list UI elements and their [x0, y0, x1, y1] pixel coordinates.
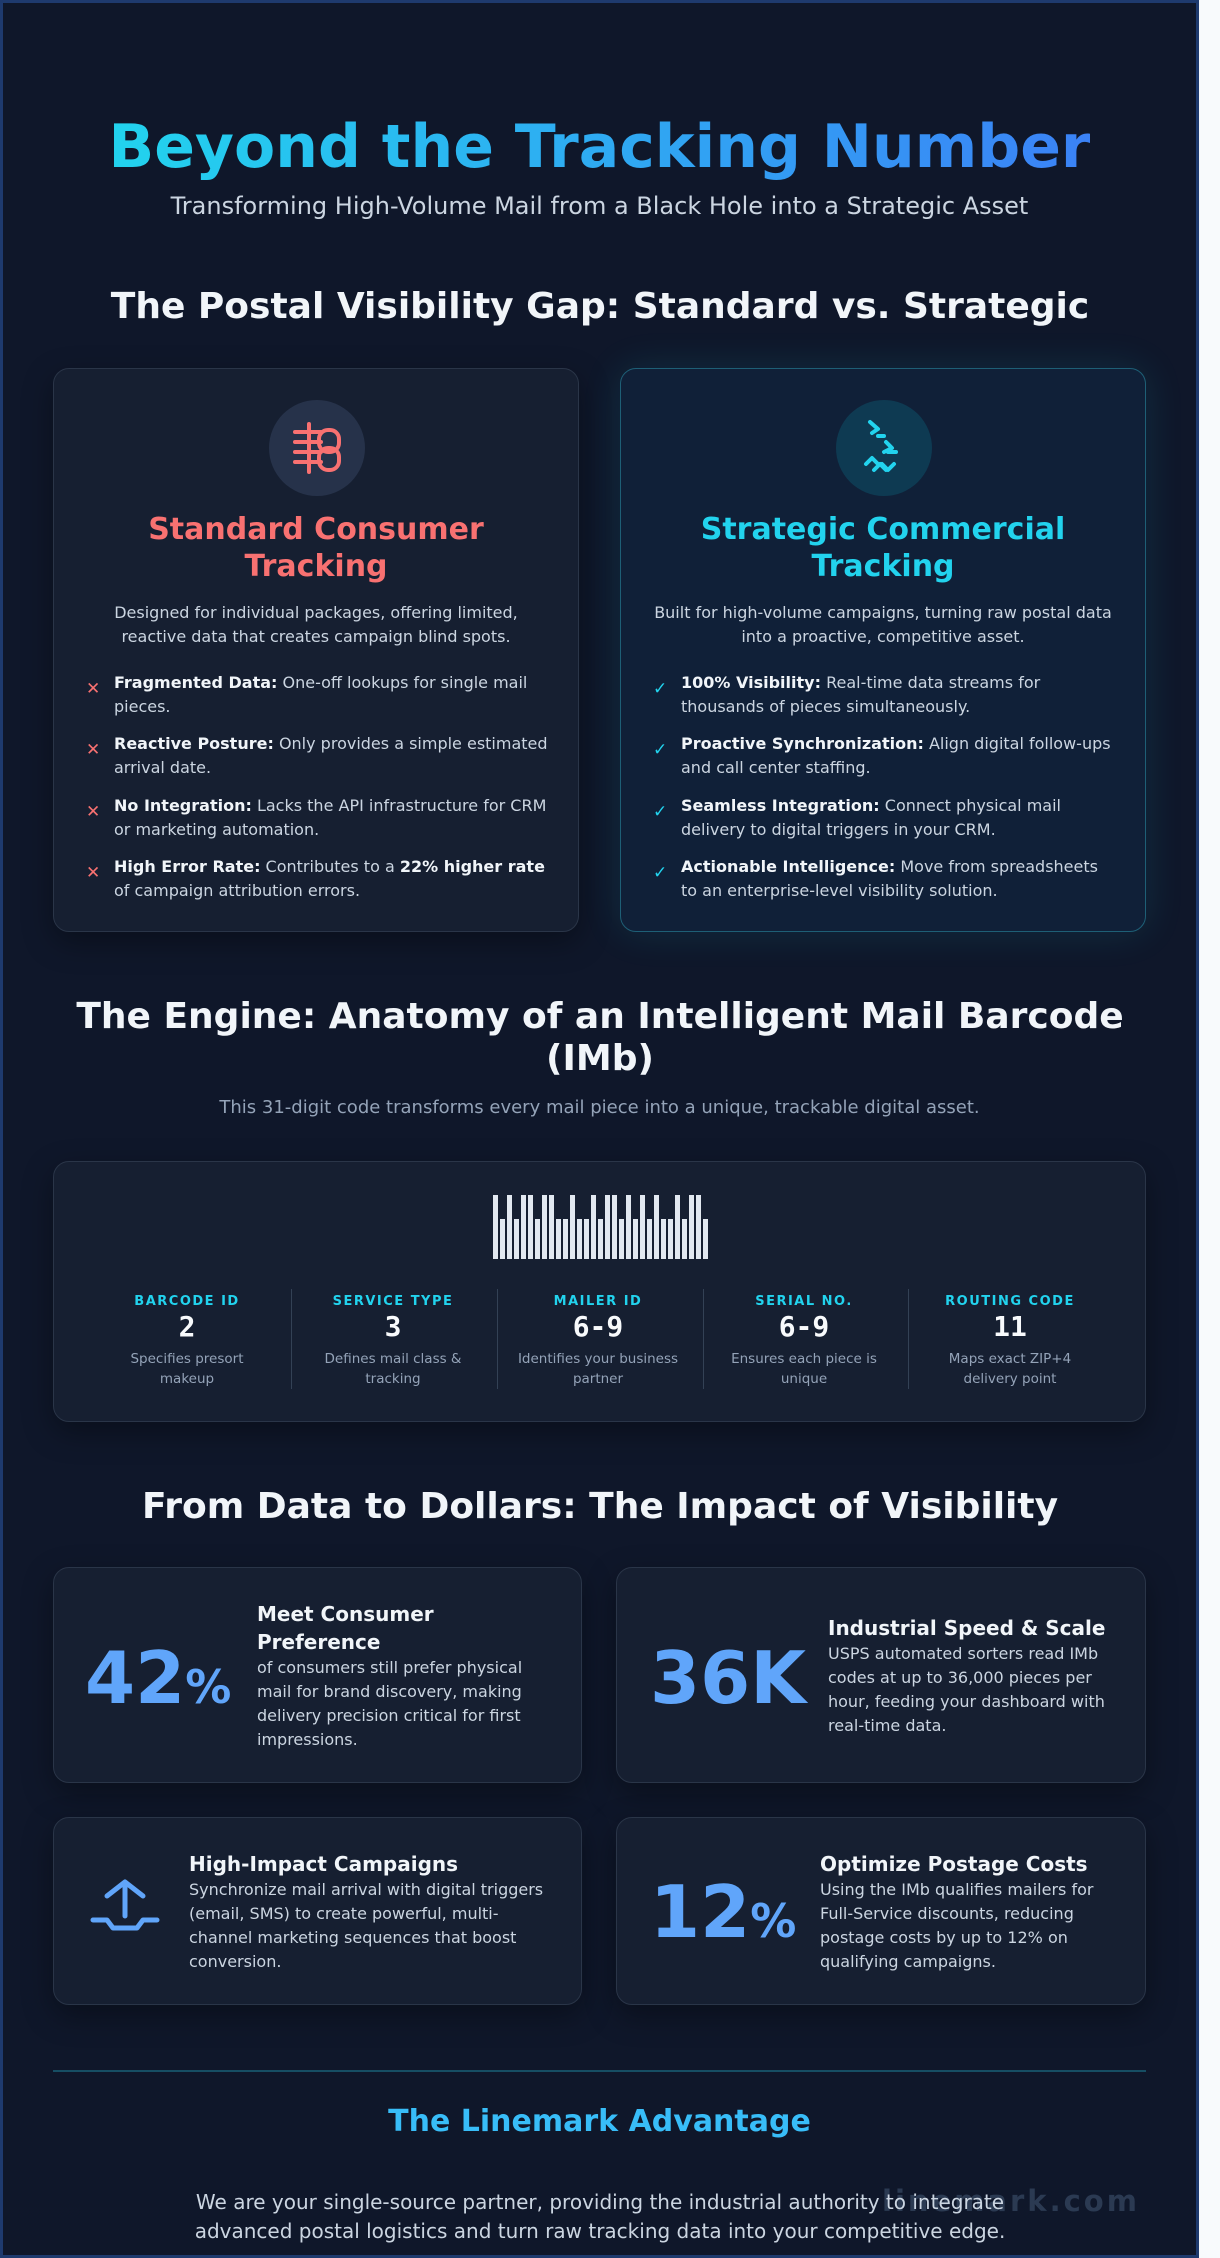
list: strengths: 100% Visibility: Real-time data streams for thousands of pieces simultaneously. — [681, 673, 1040, 716]
stat number: 42% — [85, 1636, 231, 1720]
list: weaknesses: ✕ — [86, 679, 100, 699]
column: barcode id: makeup — [160, 1371, 214, 1387]
stat text: Industrial Speed & Scale — [828, 1616, 1105, 1640]
stat text: High-Impact Campaigns — [189, 1852, 458, 1876]
stat card: 12% — [616, 1817, 1146, 2005]
icon: fragmented — [269, 400, 365, 496]
description: Designed for individual packages, offering limited, reactive data that creates campaign blind spots. — [114, 603, 518, 646]
stat text: Optimize Postage Costs — [820, 1852, 1088, 1876]
column: serial no: SERIAL NO. — [755, 1294, 853, 1309]
column: routing code: Maps exact ZIP+4 — [949, 1351, 1071, 1367]
subheading: This 31-digit code transforms every mail piece into a unique, trackable digital asset. — [219, 1097, 980, 1118]
column: serial no — [731, 1294, 877, 1387]
stat text: USPS automated sorters read IMb codes at up to 36,000 pieces per hour, feeding your dashboard with real-time data. — [828, 1644, 1105, 1735]
stat card: 42% — [53, 1567, 582, 1783]
stat number: 12% — [650, 1870, 796, 1954]
column: routing code: 11 — [993, 1310, 1027, 1343]
list: strengths: Seamless Integration: Connect physical mail delivery to digital triggers in your CRM. — [681, 796, 1061, 839]
card title — [148, 512, 484, 584]
column: mailer id: 6-9 — [573, 1310, 623, 1343]
list: weaknesses — [86, 673, 548, 900]
column: barcode id — [130, 1294, 244, 1387]
stat text: of consumers still prefer physical mail for brand discovery, making delivery precision critical for first impressions. — [257, 1658, 522, 1749]
list: strengths: ✓ — [653, 740, 667, 760]
column: service type: Defines mail class & — [325, 1351, 461, 1367]
footer text: We are your single-source partner, providing the industrial authority to integrate advanced postal logistics and turn raw tracking data into your competitive edge. — [195, 2190, 1005, 2243]
card title: Standard Consumer — [148, 512, 484, 547]
list: strengths: ✓ — [653, 679, 667, 699]
stat text: Meet Consumer Preference — [257, 1602, 434, 1654]
column: barcode id: BARCODE ID — [134, 1294, 240, 1309]
panel: strategic tracking — [620, 368, 1146, 932]
column: mailer id — [518, 1294, 678, 1387]
stat number: 36K — [650, 1636, 806, 1720]
footer title: The Linemark Advantage — [388, 2104, 811, 2139]
list: weaknesses: Fragmented Data: One-off lookups for single mail pieces. — [114, 673, 527, 716]
list: weaknesses: ✕ — [86, 863, 100, 883]
list: weaknesses: No Integration: Lacks the API infrastructure for CRM or marketing automation. — [114, 796, 546, 839]
heading: engine: The Engine: Anatomy of an Intelligent Mail Barcode (IMb) — [76, 996, 1124, 1079]
list: weaknesses: ✕ — [86, 802, 100, 822]
stat text: Synchronize mail arrival with digital triggers (email, SMS) to create powerful, multi-channel marketing sequences that boost conversion. — [189, 1880, 543, 1971]
column: service type: 3 — [385, 1310, 401, 1343]
panel: barcode anatomy — [53, 1161, 1146, 1422]
list: weaknesses: Reactive Posture: Only provides a simple estimated arrival date. — [114, 734, 548, 777]
title: Beyond the Tracking Number — [108, 112, 1090, 182]
column: mailer id: Identifies your business — [518, 1351, 678, 1367]
heading: impact: From Data to Dollars: The Impact of Visibility — [142, 1486, 1058, 1527]
list: strengths: ✓ — [653, 802, 667, 822]
column: service type: tracking — [365, 1371, 421, 1387]
icon: streams — [836, 400, 932, 496]
list: strengths: ✓ — [653, 863, 667, 883]
subtitle: Transforming High-Volume Mail from a Black Hole into a Strategic Asset — [171, 192, 1028, 220]
list: strengths — [653, 673, 1111, 900]
heading: visibility gap: The Postal Visibility Gap: Standard vs. Strategic — [111, 286, 1089, 327]
card title — [701, 512, 1065, 584]
list: weaknesses: ✕ — [86, 740, 100, 760]
column: serial no: Ensures each piece is — [731, 1351, 877, 1367]
description: Built for high-volume campaigns, turning raw postal data into a proactive, competitive asset. — [654, 603, 1112, 646]
stat text: Using the IMb qualifies mailers for Full-Service discounts, reducing postage costs by up to 12% on qualifying campaigns. — [820, 1880, 1093, 1971]
column: routing code — [945, 1294, 1075, 1387]
list: strengths: Actionable Intelligence: Move from spreadsheets to an enterprise-level visibility solution. — [681, 857, 1098, 900]
barcode — [493, 1195, 708, 1259]
panel: standard tracking — [53, 368, 579, 932]
column: serial no: unique — [781, 1371, 827, 1387]
card title: Tracking — [811, 549, 955, 584]
column: routing code: ROUTING CODE — [945, 1294, 1075, 1309]
column: barcode id: 2 — [179, 1310, 195, 1343]
stat card: campaigns — [53, 1817, 582, 2005]
column: service type: SERVICE TYPE — [333, 1294, 453, 1309]
column: routing code: delivery point — [964, 1371, 1056, 1387]
stat card: 36K — [616, 1567, 1146, 1783]
stat text — [257, 1602, 522, 1749]
column: serial no: 6-9 — [779, 1310, 829, 1343]
column: mailer id: MAILER ID — [554, 1294, 642, 1309]
list: strengths: Proactive Synchronization: Align digital follow-ups and call center staffing. — [681, 734, 1111, 777]
column: barcode id: Specifies presort — [130, 1351, 244, 1367]
list: weaknesses: High Error Rate: Contributes to a 22% higher rate of campaign attribution errors. — [114, 857, 545, 900]
column: mailer id: partner — [573, 1371, 623, 1387]
icon: sync arrow — [90, 1879, 160, 1930]
card title: Strategic Commercial — [701, 512, 1065, 547]
column: service type — [325, 1294, 461, 1387]
watermark: linemark.com — [882, 2184, 1140, 2218]
card title: Tracking — [244, 549, 388, 584]
